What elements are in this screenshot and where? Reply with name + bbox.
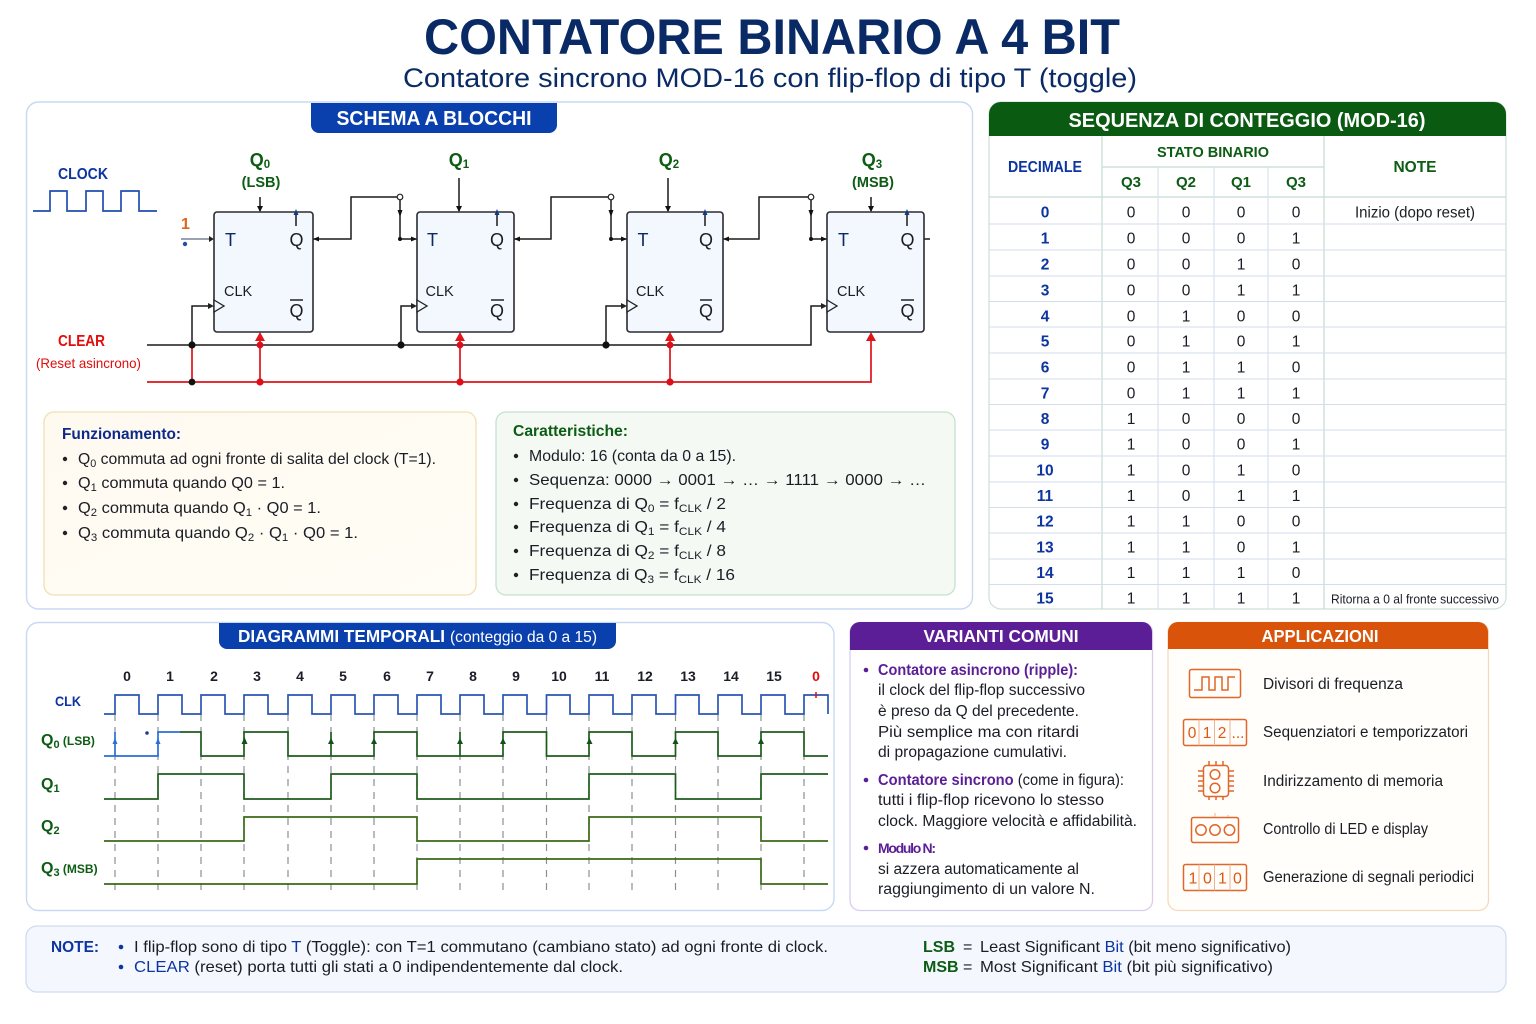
table rows: 1 [1292, 488, 1300, 505]
panel: funzionamento: 1 [246, 507, 252, 519]
flip-flop Q0: CLK [224, 284, 253, 300]
Q0 waveform: (LSB) [60, 734, 95, 748]
icon: binary digits: 1 [1189, 870, 1198, 888]
table rows: 4 [1041, 309, 1050, 326]
note: MSB: = [963, 959, 972, 976]
clear label: (Reset asincrono) [36, 355, 141, 371]
input T = 1 [181, 216, 214, 246]
variant: modulo N: Modulo N: [878, 840, 936, 856]
table rows: 0 [1237, 540, 1246, 557]
table rows: 8 [1041, 411, 1050, 428]
table rows: 0 [1127, 334, 1136, 351]
flip-flop Q0: Q [290, 301, 304, 321]
table rows: 0 [1292, 411, 1301, 428]
clock cycle numbers [123, 668, 820, 684]
table rows: 1 [1127, 540, 1135, 557]
flip-flop Q0: Q [290, 230, 304, 250]
Q2 waveform: 2 [53, 825, 60, 837]
table rows: 1 [1237, 257, 1245, 274]
panel: funzionamento: · Q [254, 525, 282, 542]
panel: caratteristiche: Sequenza: 0000 → 0001 → … → 1111 → 0000 → … [529, 472, 926, 489]
table rows: 9 [1041, 437, 1050, 454]
table header: Q2 [1176, 174, 1196, 191]
CLK waveform [55, 692, 828, 714]
table rows: 0 [1041, 205, 1049, 222]
table rows: 1 [1237, 386, 1245, 403]
table rows: 11 [1037, 488, 1054, 505]
panel: caratteristiche: CLK [679, 574, 702, 586]
flip-flop Q2 [627, 150, 723, 332]
clock cycle numbers: 12 [637, 668, 653, 684]
panel: funzionamento: Q [78, 525, 90, 542]
table rows: 0 [1292, 309, 1301, 326]
heading: diagrammi temporali [219, 623, 616, 649]
flip-flop Q3: CLK [837, 284, 866, 300]
panel: caratteristiche [496, 412, 955, 595]
table rows: 0 [1237, 437, 1246, 454]
icon: counter digits: 1 [1203, 725, 1211, 742]
table rows: 14 [1036, 565, 1054, 582]
panel: caratteristiche: = f [654, 543, 680, 560]
table rows: 0 [1292, 205, 1301, 222]
clock cycle numbers: 0 [812, 668, 820, 684]
table rows: 1 [1292, 283, 1300, 300]
panel: funzionamento: · Q0 = 1. [288, 525, 358, 542]
table rows: 0 [1127, 283, 1136, 300]
panel: schema a blocchi [26, 102, 972, 609]
flip-flop Q3: T [838, 230, 849, 250]
table rows: 1 [1292, 334, 1300, 351]
Q3 waveform: (MSB) [60, 862, 98, 876]
panel: caratteristiche: 2 [648, 550, 654, 562]
flip-flop Q3: 3 [876, 159, 882, 171]
clock cycle numbers: 8 [469, 668, 477, 684]
table rows: 1 [1182, 514, 1190, 531]
table rows: 1 [1237, 591, 1245, 608]
panel: caratteristiche: Modulo: 16 (conta da 0 a 15). [529, 448, 736, 465]
clock and clear wiring [147, 303, 876, 386]
panel: funzionamento: commuta quando Q0 = 1. [97, 475, 285, 492]
table rows: 6 [1041, 360, 1050, 377]
table rows: 0 [1127, 257, 1136, 274]
variant: asincrono: il clock del flip-flop successivo [878, 682, 1085, 699]
note: MSB: Most Significant Bit (bit più significativo) [980, 959, 1273, 976]
table rows: 0 [1127, 386, 1136, 403]
table grid [989, 136, 1506, 609]
panel: funzionamento: 1 [282, 532, 288, 544]
flip-flop Q2: T [638, 230, 648, 250]
table rows: 1 [1182, 540, 1190, 557]
table rows: 0 [1237, 411, 1246, 428]
text: indirizzamento: Indirizzamento di memoria [1263, 773, 1443, 790]
table rows: Ritorna a 0 al fronte successivo [1331, 592, 1499, 607]
panel: funzionamento: 0 [90, 458, 96, 470]
panel: caratteristiche: CLK [679, 550, 703, 562]
table rows: 0 [1292, 565, 1301, 582]
clock cycle numbers: 9 [512, 668, 520, 684]
panel: caratteristiche: Frequenza di Q [529, 567, 639, 584]
panel: funzionamento: 1 [91, 482, 97, 494]
heading: schema a blocchi [311, 103, 557, 133]
text: divisori di frequenza: Divisori di frequenza [1263, 676, 1403, 693]
table rows: 0 [1127, 360, 1136, 377]
panel: funzionamento [44, 412, 476, 595]
table rows: 12 [1036, 514, 1054, 531]
flip-flop Q0 [214, 150, 313, 332]
table header: NOTE [1393, 159, 1437, 176]
icon: counter digits: 2 [1218, 725, 1226, 742]
Q1 waveform: 1 [53, 783, 60, 795]
icon: counter digits [1184, 720, 1246, 746]
flip-flop Q2: Q [699, 301, 713, 321]
note: LSB: LSB [923, 939, 955, 956]
table rows: 0 [1182, 411, 1191, 428]
clock cycle numbers: 14 [723, 668, 739, 684]
clear label [36, 333, 141, 371]
flip-flop Q0: Q [250, 150, 264, 170]
table rows: 1 [1292, 231, 1300, 248]
table header [1008, 144, 1437, 191]
flip-flop Q1: 1 [463, 159, 470, 171]
table header: STATO BINARIO [1157, 144, 1269, 161]
flip-flop Q0: (LSB) [242, 175, 280, 191]
note: tipo T: I flip-flop sono di tipo T (Toggle): con T=1 commutano (cambiano stato) ad ogni fronte di clock. [134, 939, 828, 956]
panel: caratteristiche: CLK [679, 526, 703, 538]
flip-flop Q3 [827, 150, 924, 332]
table rows: 0 [1182, 463, 1191, 480]
text: sequenziatori: Sequenziatori e temporizzatori [1263, 724, 1468, 741]
flip-flop Q2: 2 [673, 159, 679, 171]
panel: caratteristiche: Frequenza di Q [529, 496, 639, 513]
Q1 waveform [41, 774, 828, 799]
flip-flop Q3: Q [900, 230, 915, 250]
table rows: 1 [1182, 309, 1190, 326]
flip-flop Q1: Q [490, 301, 504, 321]
input T = 1: 1 [181, 216, 190, 233]
clock cycle numbers: 4 [296, 668, 304, 684]
clock cycle numbers: 10 [551, 668, 567, 684]
variant: modulo N [864, 840, 1095, 898]
table rows: 7 [1041, 386, 1049, 403]
note: clear: CLEAR (reset) porta tutti gli stati a 0 indipendentemente dal clock. [134, 959, 623, 976]
flip-flop Q2: Q [659, 150, 673, 170]
clock cycle numbers: 7 [426, 668, 434, 684]
table rows: 0 [1127, 231, 1136, 248]
heading: applicazioni: APPLICAZIONI [1262, 626, 1378, 646]
flip-flop Q1: Q [490, 230, 504, 250]
table rows: 1 [1127, 411, 1135, 428]
panel: caratteristiche: CLK [679, 503, 703, 515]
variant: sincrono: tutti i flip-flop ricevono lo stesso [878, 792, 1104, 809]
table rows: 1 [1127, 591, 1135, 608]
heading: varianti comuni [850, 622, 1152, 650]
panel: applicazioni [1168, 622, 1488, 910]
panel: varianti comuni [850, 622, 1152, 910]
panel: caratteristiche: Caratteristiche: [513, 423, 628, 440]
table rows: 1 [1292, 437, 1300, 454]
text: controllo LED: Controllo di LED e display [1263, 821, 1428, 838]
variant: sincrono [864, 772, 1137, 830]
table rows: 1 [1127, 565, 1135, 582]
panel: funzionamento: Q [78, 451, 90, 468]
icon: LED display [1192, 813, 1238, 842]
panel: caratteristiche: / 8 [702, 543, 726, 560]
table rows: 5 [1041, 334, 1050, 351]
table header: Q3 [1121, 174, 1141, 191]
table rows: 0 [1292, 257, 1301, 274]
panel: note: NOTE: [51, 939, 99, 956]
variant: sincrono: clock. Maggiore velocità e affidabilità. [878, 813, 1137, 830]
table rows: 1 [1182, 591, 1190, 608]
heading: diagrammi temporali: (conteggio da 0 a 15) [450, 629, 597, 646]
Q3 waveform: 3 [53, 867, 60, 879]
flip-flop Q2: Q [699, 230, 713, 250]
table rows: 0 [1237, 309, 1246, 326]
feedback wiring between flip-flops [313, 194, 930, 242]
panel: diagrammi temporali [26, 622, 834, 910]
table rows: 1 [1292, 540, 1300, 557]
table rows: 1 [1127, 463, 1135, 480]
table rows: 1 [1237, 463, 1245, 480]
table rows: 1 [1182, 386, 1190, 403]
table rows: 0 [1237, 514, 1246, 531]
panel: funzionamento: · Q0 = 1. [252, 500, 321, 517]
flip-flop Q1 [417, 150, 514, 332]
table rows: 0 [1182, 257, 1191, 274]
panel: caratteristiche: Frequenza di Q [529, 543, 639, 560]
table rows: 0 [1127, 309, 1136, 326]
panel: caratteristiche: / 16 [702, 567, 735, 584]
variant: modulo N: si azzera automaticamente al [878, 861, 1079, 878]
flip-flop Q3: Q [900, 301, 915, 321]
icon: memory chip [1198, 761, 1234, 800]
variant: modulo N: raggiungimento di un valore N. [878, 881, 1095, 898]
table rows: 1 [1127, 514, 1135, 531]
panel: funzionamento: commuta quando Q [97, 525, 248, 542]
heading: sequenza di conteggio: SEQUENZA DI CONTEGGIO (MOD-16) [1068, 109, 1426, 132]
panel: funzionamento: Q [78, 475, 90, 492]
heading: applicazioni [1168, 622, 1488, 649]
panel: note [26, 926, 1506, 992]
table rows: 1 [1182, 360, 1190, 377]
heading: schema a blocchi: SCHEMA A BLOCCHI [336, 107, 532, 130]
icon: counter digits: 0 [1188, 725, 1197, 742]
flip-flop Q1: CLK [426, 284, 454, 300]
clock cycle numbers: 11 [595, 668, 610, 684]
panel: caratteristiche: = f [654, 496, 680, 513]
table rows: 0 [1237, 334, 1246, 351]
clock cycle numbers: 5 [339, 668, 347, 684]
Q3 waveform [41, 859, 828, 884]
table rows: 1 [1237, 488, 1245, 505]
heading: sequenza di conteggio [989, 102, 1506, 136]
clock cycle numbers: 6 [383, 668, 391, 684]
table rows: 1 [1041, 231, 1050, 248]
panel: caratteristiche: 1 [648, 526, 654, 538]
icon: binary digits: 1 [1218, 870, 1227, 888]
panel: caratteristiche: 0 [648, 503, 654, 515]
clock cycle numbers: 15 [766, 668, 782, 684]
table rows: 3 [1041, 283, 1050, 300]
clock label and waveform: CLOCK [58, 166, 109, 183]
table rows: 0 [1127, 205, 1136, 222]
table rows: 1 [1182, 565, 1190, 582]
Q0 waveform [41, 731, 828, 756]
variant: sincrono: Contatore sincrono (come in figura): [878, 772, 1124, 789]
variant: asincrono [864, 662, 1085, 761]
clock label and waveform [33, 166, 157, 211]
clock cycle numbers: 2 [210, 668, 218, 684]
table rows: 0 [1182, 231, 1191, 248]
note: LSB: Least Significant Bit (bit meno significativo) [980, 939, 1291, 956]
Q3 waveform: Q [41, 860, 53, 877]
table rows: 0 [1237, 205, 1246, 222]
panel: caratteristiche: / 4 [702, 519, 726, 536]
table rows: 0 [1292, 463, 1301, 480]
panel: funzionamento: 2 [248, 532, 254, 544]
panel: funzionamento: 3 [91, 532, 97, 544]
variant: asincrono: è preso da Q del precedente. [878, 703, 1079, 720]
icon: square wave [1190, 670, 1240, 698]
table rows: 1 [1237, 565, 1245, 582]
flip-flop Q0: T [225, 230, 236, 250]
clock cycle numbers: 0 [123, 668, 131, 684]
table rows: 0 [1182, 437, 1191, 454]
table rows: 1 [1182, 334, 1190, 351]
table rows: 2 [1041, 257, 1049, 274]
variant: asincrono: Più semplice ma con ritardi [878, 724, 1079, 741]
flip-flop Q3: Q [862, 150, 876, 170]
panel: sequenza di conteggio [989, 102, 1506, 609]
panel: caratteristiche: = f [654, 567, 679, 584]
Q1 waveform: Q [41, 776, 53, 793]
heading: varianti comuni: VARIANTI COMUNI [924, 626, 1078, 646]
subtitle: Contatore sincrono MOD-16 con flip-flop di tipo T (toggle) [403, 63, 1137, 93]
table rows: 0 [1182, 283, 1191, 300]
panel: caratteristiche: = f [654, 519, 680, 536]
Q0 waveform: 0 [53, 739, 60, 751]
table header: DECIMALE [1008, 159, 1082, 176]
table rows: 13 [1036, 540, 1054, 557]
clear label: CLEAR [58, 333, 105, 350]
table rows: 1 [1292, 591, 1300, 608]
heading: diagrammi temporali: DIAGRAMMI TEMPORALI [238, 626, 445, 646]
panel: funzionamento: 2 [91, 507, 97, 519]
panel: caratteristiche: / 2 [702, 496, 726, 513]
table header: Q1 [1231, 174, 1251, 191]
table rows: 0 [1237, 231, 1246, 248]
variant: asincrono: Contatore asincrono (ripple): [878, 662, 1078, 679]
panel: funzionamento: commuta ad ogni fronte di salita del clock (T=1). [96, 451, 436, 468]
icon: binary digits: 0 [1203, 870, 1212, 888]
icon: counter digits: ... [1232, 725, 1244, 742]
Q0 waveform: Q [41, 732, 53, 749]
table rows: 0 [1182, 488, 1191, 505]
clock cycle numbers: 3 [253, 668, 261, 684]
flip-flop Q1: Q [449, 150, 463, 170]
table rows: 0 [1182, 205, 1191, 222]
table rows: 1 [1237, 360, 1245, 377]
title: CONTATORE BINARIO A 4 BIT [424, 9, 1120, 65]
text: generazione segnali: Generazione di segnali periodici [1263, 869, 1474, 886]
table rows: 0 [1292, 514, 1301, 531]
table rows: Inizio (dopo reset) [1355, 205, 1475, 222]
flip-flop Q1: T [427, 230, 438, 250]
panel: funzionamento: commuta quando Q [97, 500, 246, 517]
table rows: 1 [1127, 437, 1135, 454]
icon: binary digits: 0 [1233, 870, 1242, 888]
panel: caratteristiche: 3 [648, 574, 654, 586]
table rows: 10 [1036, 463, 1054, 480]
Q2 waveform: Q [41, 818, 53, 835]
panel: funzionamento: Funzionamento: [62, 426, 181, 443]
table header: Q3 [1286, 174, 1306, 191]
variant: asincrono: di propagazione cumulativi. [878, 744, 1067, 761]
table rows: 0 [1292, 360, 1301, 377]
CLK waveform: CLK [55, 693, 81, 709]
note: MSB: MSB [923, 959, 959, 976]
flip-flop Q2: CLK [636, 284, 665, 300]
table rows: 1 [1237, 283, 1245, 300]
note: LSB: = [963, 939, 972, 956]
clock cycle numbers: 1 [166, 668, 174, 684]
Q2 waveform [41, 817, 828, 841]
dashed clock edge guides [115, 714, 804, 895]
panel: funzionamento: Q [78, 500, 90, 517]
table rows [1036, 205, 1499, 608]
flip-flop Q3: (MSB) [852, 175, 894, 191]
panel: caratteristiche: Frequenza di Q [529, 519, 639, 536]
table rows: 15 [1036, 591, 1054, 608]
table rows: 1 [1127, 488, 1135, 505]
flip-flop Q0: 0 [264, 159, 270, 171]
icon: binary digits [1184, 864, 1246, 890]
clock cycle numbers: 13 [680, 668, 696, 684]
table rows: 1 [1292, 386, 1300, 403]
